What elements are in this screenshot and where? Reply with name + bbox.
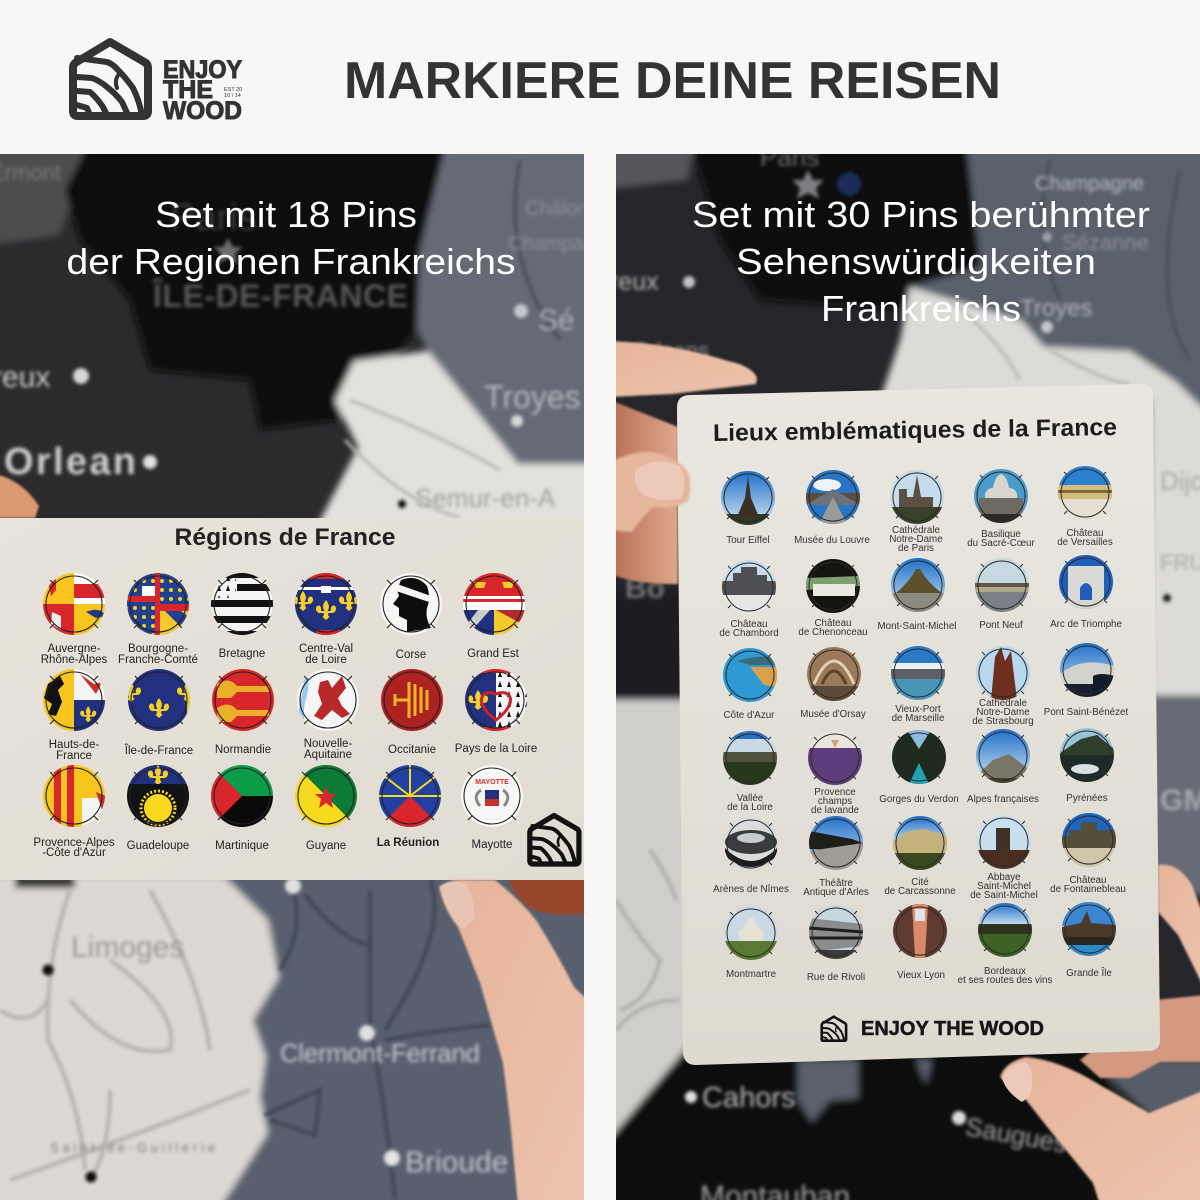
pin: Pyrénées bbox=[1060, 728, 1114, 804]
pin: Rue de Rivoli bbox=[807, 905, 865, 983]
pin: Abbaye Saint-Michel de Saint-Michel: Abbaye bbox=[987, 872, 1021, 883]
pin: Centre-Val de Loire: de Loire bbox=[305, 654, 347, 666]
pin: Cité de Carcassonne: de Carcassonne bbox=[884, 886, 956, 897]
pin: Centre-Val de Loire bbox=[295, 573, 357, 663]
pin: Théâtre Antique d'Arles: Antique d'Arles bbox=[803, 887, 869, 898]
pin: Bretagne: Bretagne bbox=[219, 648, 265, 660]
pin: Château de Versailles: Château bbox=[1066, 528, 1104, 539]
logo wordmark: 10 \ 14 bbox=[224, 93, 241, 99]
blurred map labels: Brioude bbox=[405, 1146, 508, 1179]
pin: Normandie: Normandie bbox=[215, 744, 271, 756]
title: MARKIERE DEINE REISEN bbox=[344, 52, 1001, 110]
pin: Théâtre Antique d'Arles bbox=[803, 816, 869, 898]
logo wordmark bbox=[163, 56, 242, 125]
hand: middle finger behind card bbox=[616, 400, 678, 464]
logo wordmark: THE bbox=[163, 76, 213, 104]
icon: card logo bbox=[530, 816, 579, 864]
pin: Cathédrale Notre-Dame de Paris bbox=[889, 470, 944, 554]
icon: card logo bbox=[822, 1017, 846, 1041]
pin: Vieux-Port de Marseille: de Marseille bbox=[892, 713, 945, 724]
pin: Provence-Alpes-Côte d'Azur: Provence-Alpes bbox=[33, 837, 115, 849]
blurred map labels: Cahors bbox=[702, 1082, 796, 1114]
pin: Vallée de la Loire: Vallée bbox=[737, 793, 764, 804]
pin: Guadeloupe bbox=[126, 764, 190, 852]
pin: Alpes françaises: Alpes françaises bbox=[967, 794, 1039, 805]
pin: Grande Île bbox=[1062, 902, 1116, 979]
pin: Musée du Louvre: Musée du Louvre bbox=[794, 535, 870, 546]
hand: fingertip over card bbox=[610, 452, 690, 532]
pin: Normandie bbox=[211, 668, 275, 756]
pin: Arc de Triomphe bbox=[1050, 555, 1122, 630]
pin: Château de Fontainebleau bbox=[1050, 813, 1126, 895]
pin: Château de Chambord bbox=[719, 560, 779, 639]
pin: Cathédrale Notre-Dame de Paris: Cathédrale bbox=[892, 525, 941, 536]
pin: Grand Est bbox=[462, 572, 526, 660]
pin: Château de Chenonceau bbox=[798, 559, 868, 638]
logo wordmark: WOOD bbox=[163, 97, 242, 125]
pin: Guadeloupe: Guadeloupe bbox=[127, 840, 189, 852]
pin: Pont Saint-Bénézet bbox=[1044, 643, 1128, 718]
pin: Bordeaux et ses routes des vins bbox=[958, 903, 1052, 986]
pin: Grande Île: Grande Île bbox=[1066, 968, 1112, 979]
pin: Centre-Val de Loire: Centre-Val bbox=[299, 643, 353, 655]
pin: Auvergne-Rhône-Alpes: Rhône-Alpes bbox=[41, 654, 107, 666]
pin: Musée d'Orsay: Musée d'Orsay bbox=[800, 709, 866, 720]
panel heading: 30 pins: Set mit 30 Pins berühmter bbox=[692, 194, 1150, 235]
pin: Pays de la Loire: Pays de la Loire bbox=[455, 743, 537, 755]
panel heading: 18 pins: der Regionen Frankreichs bbox=[66, 241, 516, 282]
pin: Musée d'Orsay bbox=[800, 647, 866, 720]
hand: index finger above card bbox=[610, 341, 757, 397]
blurred map labels: Saint-de-Guillerie bbox=[50, 1140, 215, 1155]
pin: Arènes de Nîmes: Arènes de Nîmes bbox=[713, 884, 789, 895]
pin: Mayotte bbox=[461, 765, 523, 851]
pin: Nouvelle-Aquitaine: Nouvelle- bbox=[304, 738, 352, 750]
blurred map labels: Troyes bbox=[1020, 295, 1092, 322]
blurred map labels: Clermont-Ferrand bbox=[280, 1038, 480, 1068]
brand logo bbox=[73, 42, 242, 125]
pin: Cathédrale Notre-Dame de Strasbourg bbox=[972, 646, 1034, 727]
pin: Cathédrale Notre-Dame de Paris: Notre-Dame bbox=[889, 534, 943, 545]
blurred map labels: Sé bbox=[538, 304, 575, 337]
logo wordmark: EST 20 bbox=[224, 87, 242, 93]
pin: Tour Eiffel bbox=[721, 471, 775, 546]
pin: Château de Chambord: de Chambord bbox=[719, 628, 779, 639]
pin: Rue de Rivoli: Rue de Rivoli bbox=[807, 972, 865, 983]
pin: Tour Eiffel: Tour Eiffel bbox=[726, 535, 770, 546]
panel: landmarks photo bbox=[600, 140, 1200, 1200]
blurred map labels: Paris bbox=[170, 197, 257, 239]
pin: Côte d'Azur bbox=[723, 648, 777, 721]
pin: Provence-Alpes-Côte d'Azur bbox=[33, 764, 115, 859]
pin: Provence-Alpes-Côte d'Azur: -Côte d'Azur bbox=[42, 847, 106, 859]
hand: fingers behind card bbox=[508, 878, 590, 915]
pin: Île-de-France bbox=[124, 669, 193, 754]
pin: Arènes de Nîmes bbox=[713, 817, 789, 895]
pin: Montmartre: Montmartre bbox=[726, 969, 777, 980]
pin: Gorges du Verdon bbox=[879, 730, 959, 805]
blurred map labels: Limoges bbox=[71, 931, 184, 964]
pin: La Réunion: La Réunion bbox=[377, 837, 439, 849]
pin: Musée du Louvre bbox=[794, 470, 870, 546]
pin: Île-de-France: Île-de-France bbox=[124, 744, 193, 757]
panel heading: 30 pins bbox=[692, 194, 1150, 329]
blurred map labels bbox=[0, 160, 617, 1182]
pin: Provence champs de lavande: Provence bbox=[814, 787, 856, 798]
pin: Occitanie bbox=[380, 668, 444, 756]
card: Lieux emblématiques de la France bbox=[677, 384, 1160, 1065]
blurred map background bbox=[600, 140, 1200, 1200]
card: Régions de France bbox=[0, 518, 584, 880]
pin: Occitanie: Occitanie bbox=[388, 744, 436, 756]
pin: Grand Est: Grand Est bbox=[467, 648, 520, 660]
blurred map labels: Champagne bbox=[508, 233, 617, 255]
pin: La Réunion bbox=[377, 764, 442, 849]
pin: Corse: Corse bbox=[396, 649, 426, 661]
hand: lower fingers behind card bbox=[610, 500, 678, 584]
pin: Arc de Triomphe: Arc de Triomphe bbox=[1050, 619, 1122, 630]
pin: Vieux-Port de Marseille: Vieux-Port bbox=[895, 704, 941, 715]
hand: thumbnail bbox=[440, 882, 474, 930]
pin: Vieux-Port de Marseille bbox=[891, 646, 945, 724]
card brand mark bbox=[822, 1017, 1044, 1041]
pin: Pont Neuf bbox=[975, 558, 1029, 631]
blurred map labels: Châlons bbox=[525, 198, 598, 220]
pin: Martinique bbox=[210, 764, 274, 852]
pin: Bourgogne-Franche-Comté: Franche-Comté bbox=[118, 654, 198, 666]
pin: Bordeaux et ses routes des vins: et ses routes des vins bbox=[958, 975, 1052, 986]
blurred map labels: reux bbox=[610, 268, 659, 296]
pin: Cathédrale Notre-Dame de Strasbourg: Cathédrale bbox=[979, 698, 1028, 709]
pin: Hauts-de-France: Hauts-de- bbox=[49, 739, 99, 751]
pin: Mont-Saint-Michel bbox=[878, 558, 956, 632]
pin: Pays de la Loire bbox=[455, 668, 537, 755]
hand: right palm behind card bbox=[1080, 995, 1200, 1078]
pin: Corse bbox=[379, 572, 443, 661]
pin: Cité de Carcassonne: Cité bbox=[911, 877, 929, 888]
pin: Provence champs de lavande: champs bbox=[818, 796, 852, 807]
panel heading: 18 pins bbox=[66, 194, 516, 282]
hand: thumb and palm holding card bbox=[439, 880, 590, 1200]
pin: Cathédrale Notre-Dame de Strasbourg: de Strasbourg bbox=[972, 716, 1034, 727]
pin: Pont Neuf: Pont Neuf bbox=[979, 620, 1023, 631]
pin: Martinique: Martinique bbox=[215, 840, 269, 852]
blurred map labels: Troyes bbox=[484, 379, 581, 415]
hand: fingernail bbox=[635, 461, 685, 500]
pin: Vieux Lyon: Vieux Lyon bbox=[897, 970, 945, 981]
pin: Château de Fontainebleau: de Fontainebleau bbox=[1050, 884, 1126, 895]
panel heading: 30 pins: Sehenswürdigkeiten bbox=[736, 241, 1096, 282]
pin: Mayotte: Mayotte bbox=[472, 839, 512, 851]
logo wordmark: ENJOY bbox=[163, 56, 242, 84]
pin: Cathédrale Notre-Dame de Strasbourg: Notre-Dame bbox=[976, 707, 1030, 718]
pin: Hauts-de-France: France bbox=[56, 750, 92, 762]
pin: Cité de Carcassonne bbox=[884, 816, 956, 897]
pin: Guyane bbox=[294, 764, 358, 852]
pin: Mont-Saint-Michel: Mont-Saint-Michel bbox=[878, 621, 956, 632]
blurred map labels: ÎLE-DE-FRANCE bbox=[151, 278, 408, 314]
pin: Bretagne bbox=[210, 572, 274, 660]
pin: Provence champs de lavande bbox=[808, 731, 862, 816]
blurred map labels: Bo bbox=[625, 572, 665, 605]
pin: Basilique du Sacré-Cœur: du Sacré-Cœur bbox=[967, 538, 1035, 549]
blurred map labels bbox=[610, 142, 1200, 1200]
pin: Château de Chenonceau: Château bbox=[814, 618, 852, 629]
pin: Auvergne-Rhône-Alpes: Auvergne- bbox=[47, 643, 101, 655]
pin: Vallée de la Loire: de la Loire bbox=[727, 802, 773, 813]
pin: Bourgogne-Franche-Comté bbox=[118, 572, 198, 666]
wordmark: ENJOY THE WOOD bbox=[861, 1018, 1044, 1040]
pin: Château de Chambord: Château bbox=[730, 619, 768, 630]
pin: Alpes françaises bbox=[967, 729, 1039, 805]
blurred map labels: Semur-en-A bbox=[415, 483, 556, 513]
pin: Abbaye Saint-Michel de Saint-Michel: de Saint-Michel bbox=[970, 890, 1038, 901]
pin: Mayotte: MAYOTTE bbox=[475, 779, 509, 786]
blurred map labels: Sézanne bbox=[1062, 230, 1149, 255]
blurred map labels: Orleans bbox=[632, 338, 709, 363]
pin: Nouvelle-Aquitaine bbox=[296, 668, 360, 761]
pin: Abbaye Saint-Michel de Saint-Michel bbox=[970, 815, 1038, 901]
panel heading: 18 pins: Set mit 18 Pins bbox=[155, 194, 417, 235]
pin: Vieux Lyon bbox=[893, 904, 947, 981]
map lines bbox=[616, 160, 1190, 1030]
pin: Château de Chenonceau: de Chenonceau bbox=[798, 627, 868, 638]
pin: Guyane: Guyane bbox=[306, 840, 346, 852]
pin: Château de Versailles: de Versailles bbox=[1057, 537, 1113, 548]
map lines bbox=[0, 160, 560, 1200]
blurred map labels: Orlean bbox=[4, 441, 136, 483]
blurred map labels: Paris bbox=[760, 142, 819, 172]
pin: Château de Fontainebleau: Château bbox=[1069, 875, 1107, 886]
pin: Bourgogne-Franche-Comté: Bourgogne- bbox=[128, 643, 188, 655]
icon: house with tree rings bbox=[73, 42, 148, 116]
hand: right fingers bbox=[1158, 865, 1200, 990]
pin: Théâtre Antique d'Arles: Théâtre bbox=[819, 878, 853, 889]
header background bbox=[0, 0, 1200, 154]
pin: Vallée de la Loire bbox=[723, 731, 777, 813]
card heading: Régions de France bbox=[174, 524, 396, 551]
pin: Pyrénées: Pyrénées bbox=[1066, 793, 1108, 804]
pin: Gorges du Verdon: Gorges du Verdon bbox=[879, 794, 959, 805]
pin: Auvergne-Rhône-Alpes bbox=[41, 572, 107, 666]
pin: Provence champs de lavande: de lavande bbox=[811, 805, 860, 816]
pin: Côte d'Azur: Côte d'Azur bbox=[724, 710, 775, 721]
pin: Pont Saint-Bénézet: Pont Saint-Bénézet bbox=[1044, 707, 1128, 718]
blurred map labels: Champagne bbox=[1035, 173, 1144, 195]
hand: top-left fingertip bbox=[0, 474, 39, 518]
pin: Cathédrale Notre-Dame de Paris: de Paris bbox=[898, 543, 934, 554]
hand: lower right thumb and palm bbox=[1000, 1057, 1200, 1200]
pin: Bordeaux et ses routes des vins: Bordeaux bbox=[984, 966, 1026, 977]
pin: Basilique du Sacré-Cœur: Basilique bbox=[981, 529, 1021, 540]
pin: Château de Versailles bbox=[1057, 466, 1113, 548]
pin: Nouvelle-Aquitaine: Aquitaine bbox=[304, 749, 352, 761]
pin: Abbaye Saint-Michel de Saint-Michel: Saint-Michel bbox=[977, 881, 1031, 892]
card heading: Lieux emblématiques de la France bbox=[713, 414, 1117, 447]
hand: thumbnail bbox=[1002, 1062, 1032, 1102]
pin: Basilique du Sacré-Cœur bbox=[967, 469, 1035, 549]
pin: Montmartre bbox=[724, 906, 778, 980]
pin: Hauts-de-France bbox=[42, 668, 106, 762]
panel heading: 30 pins: Frankreichs bbox=[821, 288, 1021, 329]
blurred map background bbox=[0, 140, 620, 1200]
panel: regions photo bbox=[0, 140, 620, 1200]
blurred map labels: Saugues bbox=[963, 1111, 1069, 1159]
